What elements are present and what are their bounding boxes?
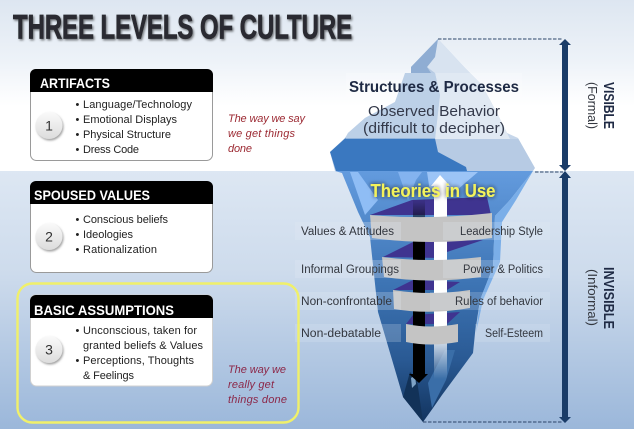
note: the way we say: done (228, 143, 252, 155)
label: visible: VISIBLE (600, 82, 617, 129)
icon: number 1 (36, 112, 62, 139)
iceberg: tip left facet (411, 39, 438, 73)
panel: artifacts (30, 69, 213, 160)
label: Theories in Use: Theories in Use (370, 181, 496, 201)
panel: basic assumptions (30, 295, 213, 386)
panel: artifacts: Physical Structure (83, 129, 171, 141)
iceberg labels (295, 222, 550, 342)
iceberg labels: Non-confrontable (301, 296, 392, 308)
note: the way we say: The way we say (228, 113, 306, 125)
panel: basic assumptions: Perceptions, Thoughts (83, 355, 194, 367)
panel: spoused values: Ideologies (83, 229, 134, 241)
icon: number 2 (36, 223, 62, 250)
iceberg labels: Values & Attitudes (301, 226, 394, 238)
arrow: fade under white (434, 343, 447, 379)
icon: number 3 (36, 336, 62, 363)
note: the way we really get things done: The way we (228, 364, 286, 376)
iceberg labels: Power & Politics (463, 264, 543, 276)
label: visible (585, 82, 617, 129)
note: the way we say (228, 113, 306, 155)
panel: spoused values: Rationalization (83, 244, 157, 256)
iceberg labels: Rules of behavior (455, 296, 543, 308)
panel: basic assumptions: Unconscious, taken for (83, 325, 197, 337)
iceberg: tip mid facet (345, 73, 440, 139)
background: below water (0, 171, 634, 429)
note: the way we really get things done: really get (228, 379, 275, 391)
label: Structures & Processes: (difficult to decipher) (363, 121, 505, 137)
note: the way we say: we get things (228, 128, 296, 140)
label: invisible: (Informal) (585, 269, 600, 326)
panel: basic assumptions: granted beliefs & Values (83, 340, 204, 352)
panel: artifacts: Dress Code (83, 144, 139, 156)
iceberg: visible tip base (330, 39, 535, 171)
label: invisible (585, 267, 617, 329)
panel: spoused values: • (76, 229, 80, 241)
arrow: downward black (409, 198, 428, 383)
arrow: upward white (431, 175, 450, 343)
panel: spoused values: Conscious beliefs (83, 214, 168, 226)
background: above water (0, 0, 634, 171)
dashed guide lines (423, 39, 563, 422)
note: the way we really get things done: things done (228, 394, 287, 406)
icon: number 3: 3 (45, 342, 53, 358)
iceberg labels: Non-debatable (301, 328, 381, 340)
panel: artifacts: Emotional Displays (83, 114, 178, 126)
iceberg: underwater facets (350, 171, 533, 422)
panel: artifacts: ARTIFACTS (40, 75, 110, 91)
iceberg: submerged part (335, 171, 533, 422)
panel: spoused values: • (76, 244, 80, 256)
panel: basic assumptions: • (76, 355, 80, 367)
spiral: grey bands (370, 213, 492, 344)
icon: number 2: 2 (45, 228, 53, 244)
label: Structures & Processes (346, 73, 522, 139)
arrow: visible span (559, 39, 571, 171)
panel: spoused values (30, 181, 213, 272)
spiral: purple bands (370, 197, 491, 324)
label: Structures & Processes: Observed Behavior (368, 104, 500, 120)
arrow: invisible span (559, 171, 571, 423)
label: invisible: INVISIBLE (600, 267, 617, 329)
highlight frame: yellow (18, 284, 298, 422)
icon: number 1: 1 (45, 118, 53, 134)
panel: artifacts: Language/Technology (83, 99, 192, 111)
panel: artifacts: • (76, 129, 80, 141)
panel: spoused values: • (76, 214, 80, 226)
panel: basic assumptions: BASIC ASSUMPTIONS (34, 302, 174, 318)
panel: artifacts: • (76, 99, 80, 111)
panel: artifacts: • (76, 114, 80, 126)
note: the way we really get things done (228, 364, 287, 406)
iceberg (330, 39, 535, 422)
panel: basic assumptions: • (76, 325, 80, 337)
panel: basic assumptions: & Feelings (83, 370, 134, 382)
iceberg: tip pale facet (427, 39, 510, 139)
iceberg labels: Leadership Style (460, 226, 543, 238)
label: Structures & Processes: Structures & Processes (349, 79, 519, 96)
iceberg labels: Informal Groupings (301, 264, 399, 276)
iceberg: tip blue band (330, 138, 467, 171)
label: visible: (Formal) (585, 82, 600, 129)
title: THREE LEVELS OF CULTURE (13, 8, 352, 46)
panel: spoused values: SPOUSED VALUES (34, 187, 150, 203)
iceberg labels: Self-Esteem (485, 328, 543, 340)
panel: artifacts: • (76, 144, 80, 156)
